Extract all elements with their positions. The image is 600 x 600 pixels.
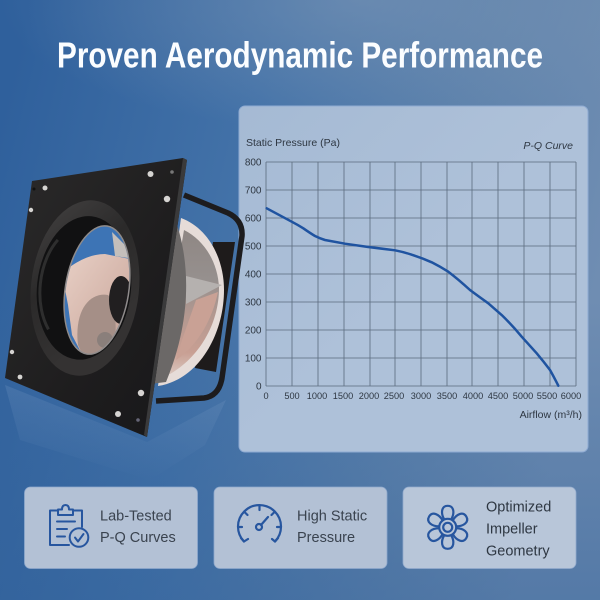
y axis labels: 0 xyxy=(256,382,262,392)
y axis labels: 600 xyxy=(245,214,262,224)
impeller xyxy=(150,218,224,386)
bolts xyxy=(10,170,174,422)
label: High Static xyxy=(297,508,367,524)
x axis labels: 3000 xyxy=(411,391,431,401)
chart label: P-Q Curve xyxy=(523,140,573,152)
icon: clipboard with check xyxy=(50,505,88,547)
impeller seen through opening xyxy=(63,225,131,355)
label: Optimized xyxy=(486,500,551,516)
x axis labels: 5500 xyxy=(537,391,557,401)
y axis title: Static Pressure (Pa) xyxy=(246,137,340,149)
x axis labels: 4000 xyxy=(463,391,483,401)
y axis labels: 200 xyxy=(245,326,262,336)
fan illustration xyxy=(5,158,245,437)
x axis labels: 3500 xyxy=(437,391,457,401)
x axis labels: 500 xyxy=(284,391,300,401)
x axis labels: 1000 xyxy=(307,391,327,401)
x axis labels: 6000 xyxy=(561,391,581,401)
card: Optimized Impeller Geometry: Impeller xyxy=(486,522,538,538)
x axis labels xyxy=(263,391,581,401)
label: Lab-Tested xyxy=(100,508,172,524)
mounting plate xyxy=(5,158,187,437)
card: Lab-Tested P-Q Curves: P-Q Curves xyxy=(100,530,176,546)
y axis labels xyxy=(245,158,262,392)
icon: impeller flower xyxy=(426,506,469,549)
x axis labels: 0 xyxy=(263,391,269,401)
x axis title: Airflow (m³/h) xyxy=(520,409,582,421)
grid xyxy=(266,162,576,386)
x axis labels: 1500 xyxy=(333,391,353,401)
y axis labels: 300 xyxy=(245,298,262,308)
panel: P-Q chart xyxy=(239,106,588,452)
card: Lab-Tested P-Q Curves xyxy=(24,487,198,568)
x axis labels: 2500 xyxy=(384,391,404,401)
y axis labels: 400 xyxy=(245,270,262,280)
motor block xyxy=(195,242,235,372)
card: Optimized Impeller Geometry: Geometry xyxy=(486,544,550,560)
inlet ring xyxy=(22,195,148,381)
x axis labels: 5000 xyxy=(513,391,533,401)
card: High Static Pressure: Pressure xyxy=(297,530,355,546)
card: High Static Pressure xyxy=(214,487,387,568)
card: Optimized Impeller Geometry xyxy=(403,487,576,568)
y axis labels: 700 xyxy=(245,186,262,196)
y axis labels: 100 xyxy=(245,354,262,364)
y axis labels: 800 xyxy=(245,158,262,168)
icon: gauge xyxy=(238,505,281,542)
P-Q curve xyxy=(267,208,558,386)
x axis labels: 2000 xyxy=(359,391,379,401)
reflection under fan xyxy=(5,385,226,480)
x axis labels: 4500 xyxy=(488,391,508,401)
handle frame xyxy=(156,195,242,401)
y axis labels: 500 xyxy=(245,242,262,252)
